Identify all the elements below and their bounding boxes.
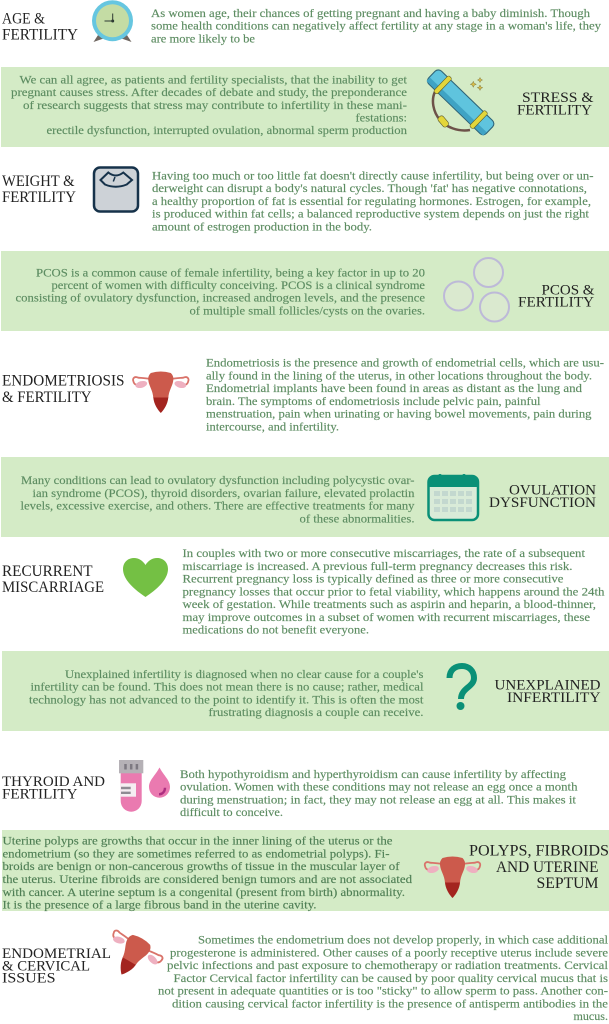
- text: thyroid: during menstruation; in fact, they may not release an egg at all. This makes it: [180, 792, 577, 806]
- icon: scale: [94, 168, 138, 212]
- text: thyroid: difficult to conceive.: [180, 805, 283, 819]
- text: endometrial and cervical: Sometimes the endometrium does not develop properly, in which case additional: [198, 932, 609, 946]
- heading: thyroid: [2, 774, 105, 802]
- heading: thyroid: THYROID AND: [2, 774, 105, 790]
- text: recurrent miscarriage: Recurrent pregnancy loss is typically defined as three or more consecutive: [182, 572, 564, 586]
- icon: calendar: [428, 474, 479, 520]
- heading: endometriosis: ENDOMETRIOSIS: [2, 372, 124, 390]
- text: stress and fertility: of research suggests that stress may contribute to infertility in these mani-: [23, 98, 407, 112]
- icon: uterus: [425, 856, 480, 898]
- text: endometrial and cervical: [158, 932, 609, 1023]
- text: age and fertility: are more likely to be: [151, 32, 255, 46]
- heading: stress and fertility: [517, 90, 594, 118]
- section: endometriosis and fertility: [2, 356, 604, 434]
- icon: test tube and drop: [119, 760, 170, 812]
- heading: PCOS and fertility: FERTILITY: [518, 294, 595, 310]
- text: stress and fertility: pregnant causes stress. After decades of debate and study, the preponderance: [11, 85, 407, 99]
- heading: thyroid: FERTILITY: [2, 786, 78, 802]
- text: ovulation: Many conditions can lead to ovulatory dysfunction including polycystic ovar-: [21, 473, 414, 487]
- text: endometrial and cervical: dition causing cervical factor infertility is the presence of antisperm antibodies in the: [172, 996, 608, 1010]
- icon: clock: [92, 0, 133, 42]
- text: endometriosis: ally found in the lining of the uterus, in other locations throughout the body.: [206, 368, 592, 382]
- section: recurrent miscarriage: [2, 546, 604, 636]
- text: age and fertility: [151, 6, 601, 46]
- text: recurrent miscarriage: pregnancy losses that occur prior to fetal viability, which happens around the 24th: [182, 584, 604, 598]
- text: endometrial and cervical: progesterone is administered. Other causes of a poorly receptive uterus include severe: [170, 946, 608, 960]
- text: weight and fertility: amount of estrogen production in the body.: [152, 220, 372, 234]
- text: thyroid: ovulation. Women with these conditions may not release an egg once a month: [180, 780, 578, 794]
- text: recurrent miscarriage: In couples with two or more consecutive miscarriages, the rate of a subsequent: [182, 546, 586, 560]
- text: recurrent miscarriage: medications do not benefit everyone.: [182, 622, 369, 636]
- heading: unexplained infertility: [494, 678, 601, 706]
- text: ovulation: ian syndrome (PCOS), thyroid disorders, ovarian failure, elevated prolactin: [32, 486, 414, 500]
- text: thyroid: Both hypothyroidism and hyperthyroidism can cause infertility by affecting: [180, 767, 566, 781]
- text: recurrent miscarriage: may improve outcomes in a subset of women with recurrent miscarriages, these: [182, 610, 590, 624]
- icon: follicle circles: [444, 258, 509, 322]
- text: PCOS: [16, 266, 425, 318]
- icon: heart: [123, 558, 168, 597]
- text: weight and fertility: derweight can disrupt a body's natural cycles. Though 'fat' has negative connotations,: [152, 181, 587, 195]
- heading: PCOS and fertility: PCOS &: [542, 282, 595, 298]
- section: age and fertility: [2, 0, 601, 46]
- text: PCOS: percent of women with difficulty conceiving. PCOS is a clinical syndrome: [52, 278, 425, 292]
- heading: endometriosis: & FERTILITY: [2, 389, 92, 406]
- heading: endometrial and cervical: [2, 946, 111, 986]
- text: endometriosis: brain. The symptoms of endometriosis include pelvic pain, painful: [206, 394, 541, 408]
- heading: age and fertility: [2, 10, 78, 44]
- text: ovulation: [20, 473, 414, 526]
- text: polyps: Uterine polyps are growths that occur in the inner lining of the uterus or the: [2, 834, 392, 848]
- text: weight and fertility: [152, 168, 594, 234]
- text: polyps: It is the presence of a large fibrous band in the uterine cavity.: [2, 898, 316, 912]
- text: unexplained: frustrating diagnosis a couple can receive.: [208, 705, 424, 719]
- panel: stress and fertility: [1, 67, 609, 147]
- text: stress and fertility: [11, 72, 408, 137]
- heading: polyps, fibroids: [469, 842, 609, 892]
- text: ovulation: of these abnormalities.: [300, 512, 414, 526]
- text: endometriosis: Endometrial implants have been found in areas as distant as the lung and: [206, 381, 582, 395]
- heading: endometrial and cervical: & CERVICAL: [2, 958, 90, 974]
- heading: polyps, fibroids: AND UTERINE: [496, 859, 598, 876]
- text: age and fertility: some health conditions can negatively affect fertility at any stage in a woman's life, they: [151, 18, 601, 32]
- heading: recurrent miscarriage: MISCARRIAGE: [2, 579, 104, 596]
- text: stress and fertility: We can all agree, as patients and fertility specialists, that the inability to get: [20, 72, 408, 86]
- text: unexplained: [29, 667, 424, 719]
- text: thyroid: [180, 767, 578, 819]
- heading: recurrent miscarriage: RECURRENT: [2, 563, 93, 580]
- text: polyps: [2, 834, 412, 912]
- heading: stress and fertility: STRESS &: [522, 90, 594, 106]
- heading: unexplained infertility: UNEXPLAINED: [494, 678, 600, 694]
- text: polyps: with cancer. A uterine septum is a congenital (present from birth) abnormality.: [2, 885, 405, 899]
- panel: polyps, fibroids and uterine septum: [2, 830, 609, 912]
- icon: tilted uterus: [97, 925, 166, 988]
- panel: PCOS and fertility: [1, 251, 609, 331]
- text: weight and fertility: a healthy proportion of fat is essential for regulating hormones. Estrogen, for example,: [152, 194, 591, 208]
- text: polyps: broids are benign or non-cancerous growths of tissue in the muscular layer of: [2, 859, 400, 873]
- heading: ovulation dysfunction: DYSFUNCTION: [489, 495, 597, 511]
- text: weight and fertility: is produced within fat cells; a balanced reproductive system depends on just the right: [152, 206, 590, 220]
- heading: age and fertility: AGE &: [2, 10, 45, 28]
- heading: polyps, fibroids: POLYPS, FIBROIDS: [469, 842, 609, 860]
- text: stress and fertility: erectile dysfunction, interrupted ovulation, abnormal sperm production: [46, 123, 407, 137]
- heading: weight and fertility: [2, 173, 76, 206]
- heading: ovulation dysfunction: OVULATION: [509, 482, 597, 498]
- text: recurrent miscarriage: [182, 546, 604, 636]
- section: thyroid and fertility: [2, 760, 578, 819]
- text: weight and fertility: Having too much or too little fat doesn't directly cause infertility, but being over or un-: [152, 168, 594, 182]
- heading: weight and fertility: WEIGHT &: [2, 173, 75, 190]
- text: endometrial and cervical: not present in adequate quantities or is too "sticky" to allow sperm to pass. Another con-: [158, 984, 608, 998]
- text: endometrial and cervical: Factor Cervical factor infertility can be caused by poor quality cervical mucus that is: [174, 971, 608, 985]
- heading: endometrial and cervical: ISSUES: [2, 970, 56, 986]
- text: endometrial and cervical: mucus.: [574, 1009, 608, 1023]
- text: stress and fertility: festations:: [356, 110, 407, 124]
- text: unexplained: Unexplained infertility is diagnosed when no clear cause for a couple's: [65, 667, 424, 681]
- heading: ovulation dysfunction: [489, 482, 597, 511]
- text: PCOS: of multiple small follicles/cysts on the ovaries.: [190, 304, 425, 318]
- text: endometriosis: Endometriosis is the presence and growth of endometrial cells, which are usu-: [206, 356, 604, 370]
- text: endometriosis: intercourse, and infertility.: [206, 420, 339, 434]
- text: endometriosis: [206, 356, 604, 434]
- text: PCOS: PCOS is a common cause of female infertility, being a key factor in up to 20: [36, 266, 425, 280]
- heading: endometrial and cervical: ENDOMETRIAL: [2, 946, 111, 962]
- text: unexplained: technology has not advanced to the point to identify it. This is often the most: [29, 692, 424, 706]
- icon: question mark: [450, 666, 474, 710]
- icon: yoga mat: [424, 67, 497, 138]
- heading: recurrent miscarriage: [2, 563, 104, 596]
- text: endometriosis: menstruation, pain when urinating or having bowel movements, pain during: [206, 406, 592, 420]
- text: recurrent miscarriage: miscarriage is increased. A previous full-term pregnancy decreases this risk.: [182, 559, 572, 573]
- text: polyps: the uterus. Uterine fibroids are considered benign tumors and are not associated: [2, 872, 412, 886]
- text: polyps: endometrium (so they are sometimes referred to as endometrial polyps). Fi-: [2, 846, 390, 860]
- text: PCOS: consisting of ovulatory dysfunction, increased androgen levels, and the presence: [16, 290, 425, 304]
- section: weight and fertility: [2, 168, 594, 234]
- panel: unexplained infertility: [2, 651, 609, 731]
- heading: age and fertility: FERTILITY: [2, 26, 78, 44]
- text: unexplained: infertility can be found. This does not mean there is no cause; rather, medical: [30, 680, 424, 694]
- icon: uterus: [133, 372, 189, 413]
- panel: ovulation dysfunction: [1, 457, 609, 537]
- heading: unexplained infertility: INFERTILITY: [507, 690, 601, 706]
- text: ovulation: levels, excessive exercise, and others. There are effective treatments for many: [20, 498, 414, 512]
- text: recurrent miscarriage: week of gestation. While treatments such as aspirin and heparin, a blood-thinner,: [182, 597, 596, 611]
- heading: polyps, fibroids: SEPTUM: [536, 875, 598, 892]
- text: age and fertility: As women age, their chances of getting pregnant and having a baby diminish. Though: [151, 6, 590, 20]
- section: endometrial and cervical issues: [2, 925, 609, 1023]
- heading: stress and fertility: FERTILITY: [517, 102, 593, 118]
- heading: endometriosis: [2, 372, 124, 406]
- text: endometrial and cervical: pelvic infections and past exposure to chemotherapy or radiation treatments. Cervical: [167, 958, 609, 972]
- heading: weight and fertility: FERTILITY: [2, 189, 76, 206]
- heading: PCOS and fertility: [518, 282, 595, 310]
